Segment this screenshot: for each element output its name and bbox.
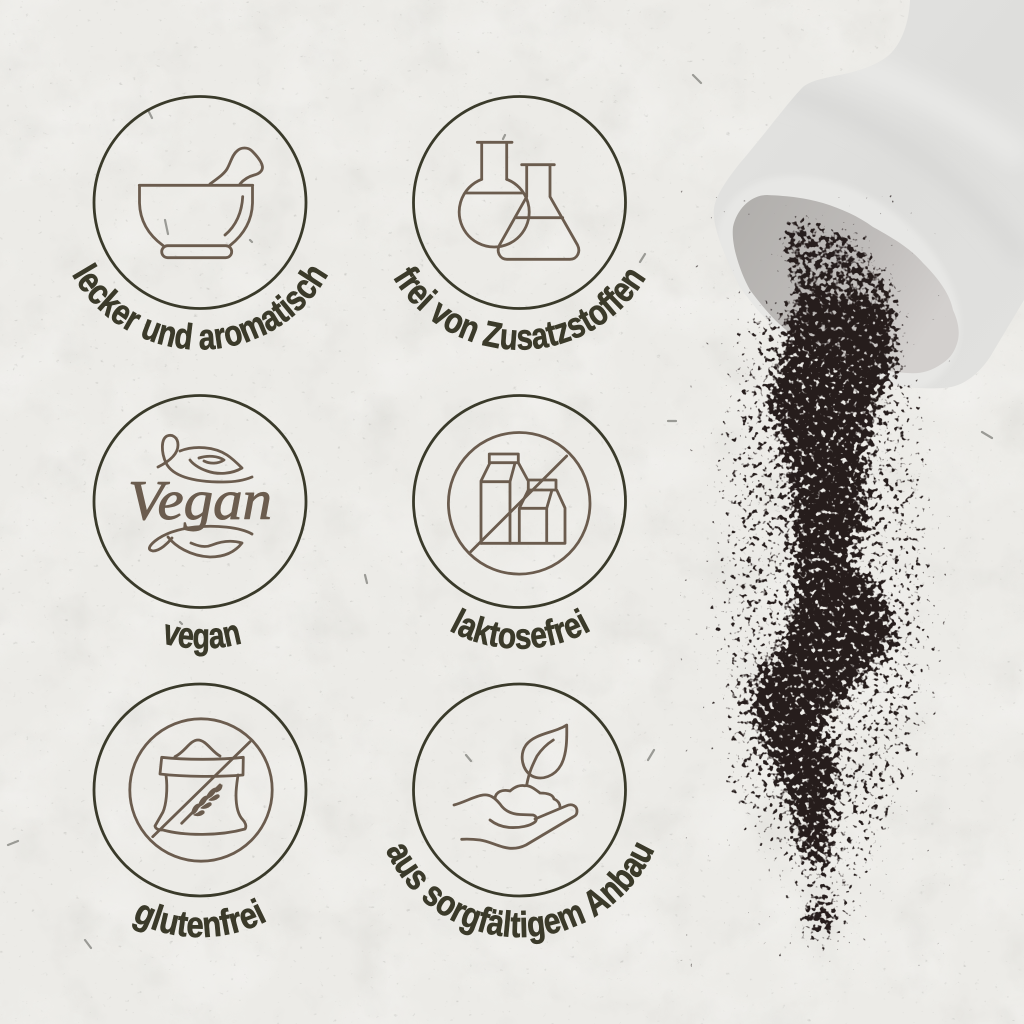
label: frei von Zusatzstoffen — [394, 266, 646, 350]
label: vegan — [165, 624, 242, 656]
badge: laktosefrei — [412, 394, 627, 650]
label: laktosefrei — [450, 608, 590, 650]
outer ring — [414, 96, 626, 308]
label: lecker und aromatisch — [72, 262, 328, 350]
icon: mortar and pestle — [139, 148, 262, 258]
label: aus sorgfältigem Anbau — [386, 842, 654, 944]
salt shaker bottle — [714, 0, 1024, 388]
icon: hand holding a seedling — [454, 725, 577, 848]
outer ring — [94, 96, 306, 308]
no-symbol ring — [130, 719, 272, 861]
icon: crossed-out flour sack with wheat — [153, 740, 250, 837]
badge: vegan — [92, 394, 308, 656]
bottle body — [714, 0, 1024, 388]
no-symbol ring — [448, 432, 590, 574]
outer ring — [414, 684, 626, 896]
icon: crossed-out milk cartons — [471, 454, 567, 552]
label: glutenfrei — [132, 898, 266, 938]
badge: glutenfrei — [92, 682, 308, 938]
icon: vegan lettering with leaves — [128, 435, 272, 557]
outer ring — [414, 396, 626, 608]
badge: aus sorgfältigem Anbau — [386, 682, 654, 944]
icon: laboratory flasks — [459, 142, 579, 259]
icon: vegan lettering with leaves: Vegan — [128, 470, 272, 532]
badge: frei von Zusatzstoffen — [394, 95, 646, 350]
falling tea powder — [716, 215, 932, 950]
outer ring — [94, 684, 306, 896]
bottle opening — [733, 195, 959, 373]
badge: lecker und aromatisch — [72, 95, 328, 350]
outer ring — [94, 396, 306, 608]
